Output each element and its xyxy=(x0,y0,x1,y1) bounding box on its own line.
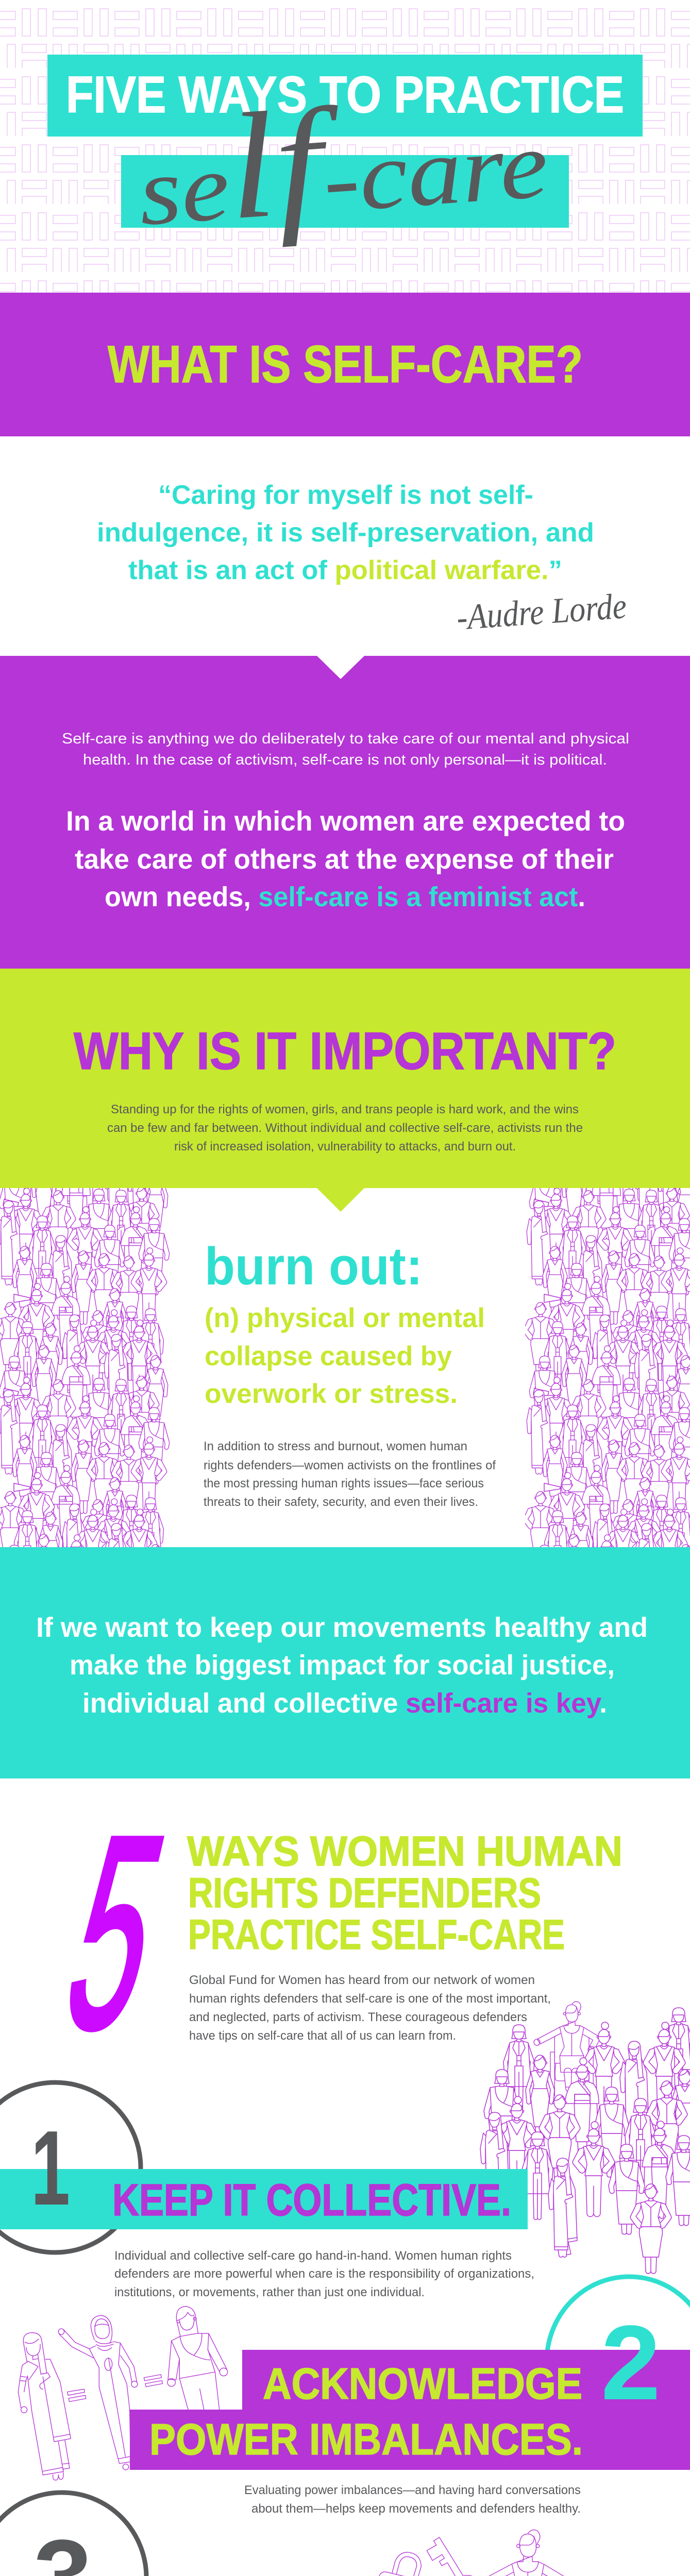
header pattern background xyxy=(0,0,690,293)
heading band xyxy=(0,293,690,436)
quote text: “Caring for myself is not self- xyxy=(158,480,533,510)
script title: self-care: self-care xyxy=(132,61,552,258)
panel: self-care definition xyxy=(0,656,690,969)
number 2: 2 xyxy=(601,2303,661,2422)
feminist act statement: In a world in which women are expected to xyxy=(66,806,625,837)
panel: what is self-care heading xyxy=(0,293,690,436)
teal banner xyxy=(0,2169,528,2229)
intro heading: WAYS WOMEN HUMAN xyxy=(187,1828,622,1875)
hand-drawn number five: 5 xyxy=(44,1779,187,2085)
burn out meaning: (n) physical or mental xyxy=(205,1303,485,1333)
panel: header xyxy=(0,0,690,293)
statement text xyxy=(36,1612,648,1719)
illustration: three women with equals signs xyxy=(18,2307,228,2480)
feminist act statement xyxy=(66,806,625,912)
paragraph xyxy=(114,2249,534,2299)
paragraph: Evaluating power imbalances—and having hard conversations xyxy=(244,2483,581,2497)
woman in sari xyxy=(18,2333,71,2480)
heading: acknowledge power imbalances: POWER IMBALANCES. xyxy=(149,2415,583,2464)
illustration: lock, key and woman in wheelchair xyxy=(372,2530,565,2576)
panel: five ways intro xyxy=(44,1779,622,2085)
panel: audre lorde quote xyxy=(0,436,690,656)
burn out term: burn out: xyxy=(205,1236,423,1296)
purple stepped banner xyxy=(130,2350,690,2470)
panel: why is it important xyxy=(0,969,690,1188)
paragraph: Individual and collective self-care go hand-in-hand. Women human rights xyxy=(114,2249,512,2263)
title line: five ways to practice: FIVE WAYS TO PRACTICE xyxy=(66,66,624,124)
crowd illustration left xyxy=(0,1188,170,1547)
white pointer arrow xyxy=(317,656,364,679)
statement text: make the biggest impact for social justice, xyxy=(70,1650,615,1681)
equals sign left xyxy=(68,2389,86,2402)
quote text xyxy=(97,480,594,585)
burn out paragraph: rights defenders—women activists on the frontlines of xyxy=(204,1459,496,1472)
paragraph: defenders are more powerful when care is the responsibility of organizations, xyxy=(114,2267,534,2281)
importance paragraph: Standing up for the rights of women, girls, and trans people is hard work, and the wins xyxy=(111,1103,579,1116)
heading: keep it collective: KEEP IT COLLECTIVE. xyxy=(112,2175,511,2225)
feminist act statement: own needs, self-care is a feminist act. xyxy=(105,882,585,912)
lime pointer arrow xyxy=(317,1188,364,1212)
woman in sash xyxy=(167,2307,228,2410)
statement text: individual and collective self-care is key. xyxy=(82,1688,607,1719)
panel: way 2 acknowledge power imbalances xyxy=(130,2277,690,2516)
panel: way 3 be safe xyxy=(0,2493,565,2576)
teal background xyxy=(0,1547,690,1778)
definition background xyxy=(0,656,690,969)
intro paragraph xyxy=(189,1973,551,2043)
heading: what is self-care: WHAT IS SELF-CARE? xyxy=(108,335,583,394)
quote background xyxy=(0,436,690,656)
gray ring xyxy=(0,2493,146,2576)
burn out meaning: collapse caused by xyxy=(205,1341,452,1371)
intro heading: RIGHTS DEFENDERS xyxy=(188,1870,541,1917)
quote attribution: -Audre Lorde xyxy=(456,586,628,638)
burn out paragraph: In addition to stress and burnout, women human xyxy=(204,1439,467,1453)
burn out meaning: overwork or stress. xyxy=(205,1379,458,1409)
teal ring xyxy=(547,2277,690,2447)
panel: way 1 keep it collective xyxy=(0,2082,534,2299)
burn out paragraph: the most pressing human rights issues—face serious xyxy=(204,1477,484,1490)
heading: acknowledge power imbalances: ACKNOWLEDGE xyxy=(263,2360,582,2409)
title banner xyxy=(47,55,643,137)
equals sign right xyxy=(144,2375,162,2387)
importance paragraph: can be few and far between. Without individual and collective self-care, activists run the xyxy=(107,1121,583,1135)
intro paragraph: Global Fund for Women has heard from our network of women xyxy=(189,1973,535,1987)
script banner xyxy=(121,155,569,228)
intro paragraph: and neglected, parts of activism. These courageous defenders xyxy=(189,2010,527,2024)
woman in hijab xyxy=(58,2315,138,2470)
intro paragraph: have tips on self-care that all of us can learn from. xyxy=(189,2029,456,2043)
paragraph: institutions, or movements, rather than just one individual. xyxy=(114,2285,425,2299)
quote text: that is an act of political warfare.” xyxy=(128,555,562,585)
key xyxy=(427,2537,482,2576)
panel: movements statement xyxy=(0,1547,690,1778)
importance paragraph xyxy=(107,1103,583,1154)
panel: burn out definition xyxy=(0,1188,690,1547)
definition paragraph: Self-care is anything we do deliberately to take care of our mental and physical xyxy=(62,731,629,747)
statement text: If we want to keep our movements healthy and xyxy=(36,1612,648,1643)
woman in wheelchair xyxy=(477,2530,565,2576)
gray ring xyxy=(0,2082,141,2252)
crowd illustration right xyxy=(525,1188,690,1547)
burn out paragraph: threats to their safety, security, and even their lives. xyxy=(204,1495,478,1509)
lime background xyxy=(0,969,690,1188)
burn out paragraph xyxy=(204,1439,496,1509)
heading: acknowledge power imbalances xyxy=(149,2360,583,2464)
importance paragraph: risk of increased isolation, vulnerability to attacks, and burn out. xyxy=(174,1140,516,1154)
burn out meaning xyxy=(205,1303,485,1409)
quote text: indulgence, it is self-preservation, and xyxy=(97,518,594,548)
definition paragraph: health. In the case of activism, self-care is not only personal—it is political. xyxy=(83,752,607,768)
feminist act statement: take care of others at the expense of their xyxy=(75,844,614,875)
heading: why is it important: WHY IS IT IMPORTANT? xyxy=(74,1022,616,1080)
number 1: 1 xyxy=(31,2109,70,2227)
padlock xyxy=(372,2552,427,2576)
intro heading xyxy=(187,1828,622,1958)
intro paragraph: human rights defenders that self-care is one of the most important, xyxy=(189,1992,551,2006)
paragraph: about them—helps keep movements and defenders healthy. xyxy=(251,2502,581,2516)
definition paragraph xyxy=(62,731,629,768)
intro heading: PRACTICE SELF-CARE xyxy=(188,1911,565,1958)
paragraph xyxy=(244,2483,581,2516)
illustration: crowd of defenders xyxy=(480,2002,690,2274)
